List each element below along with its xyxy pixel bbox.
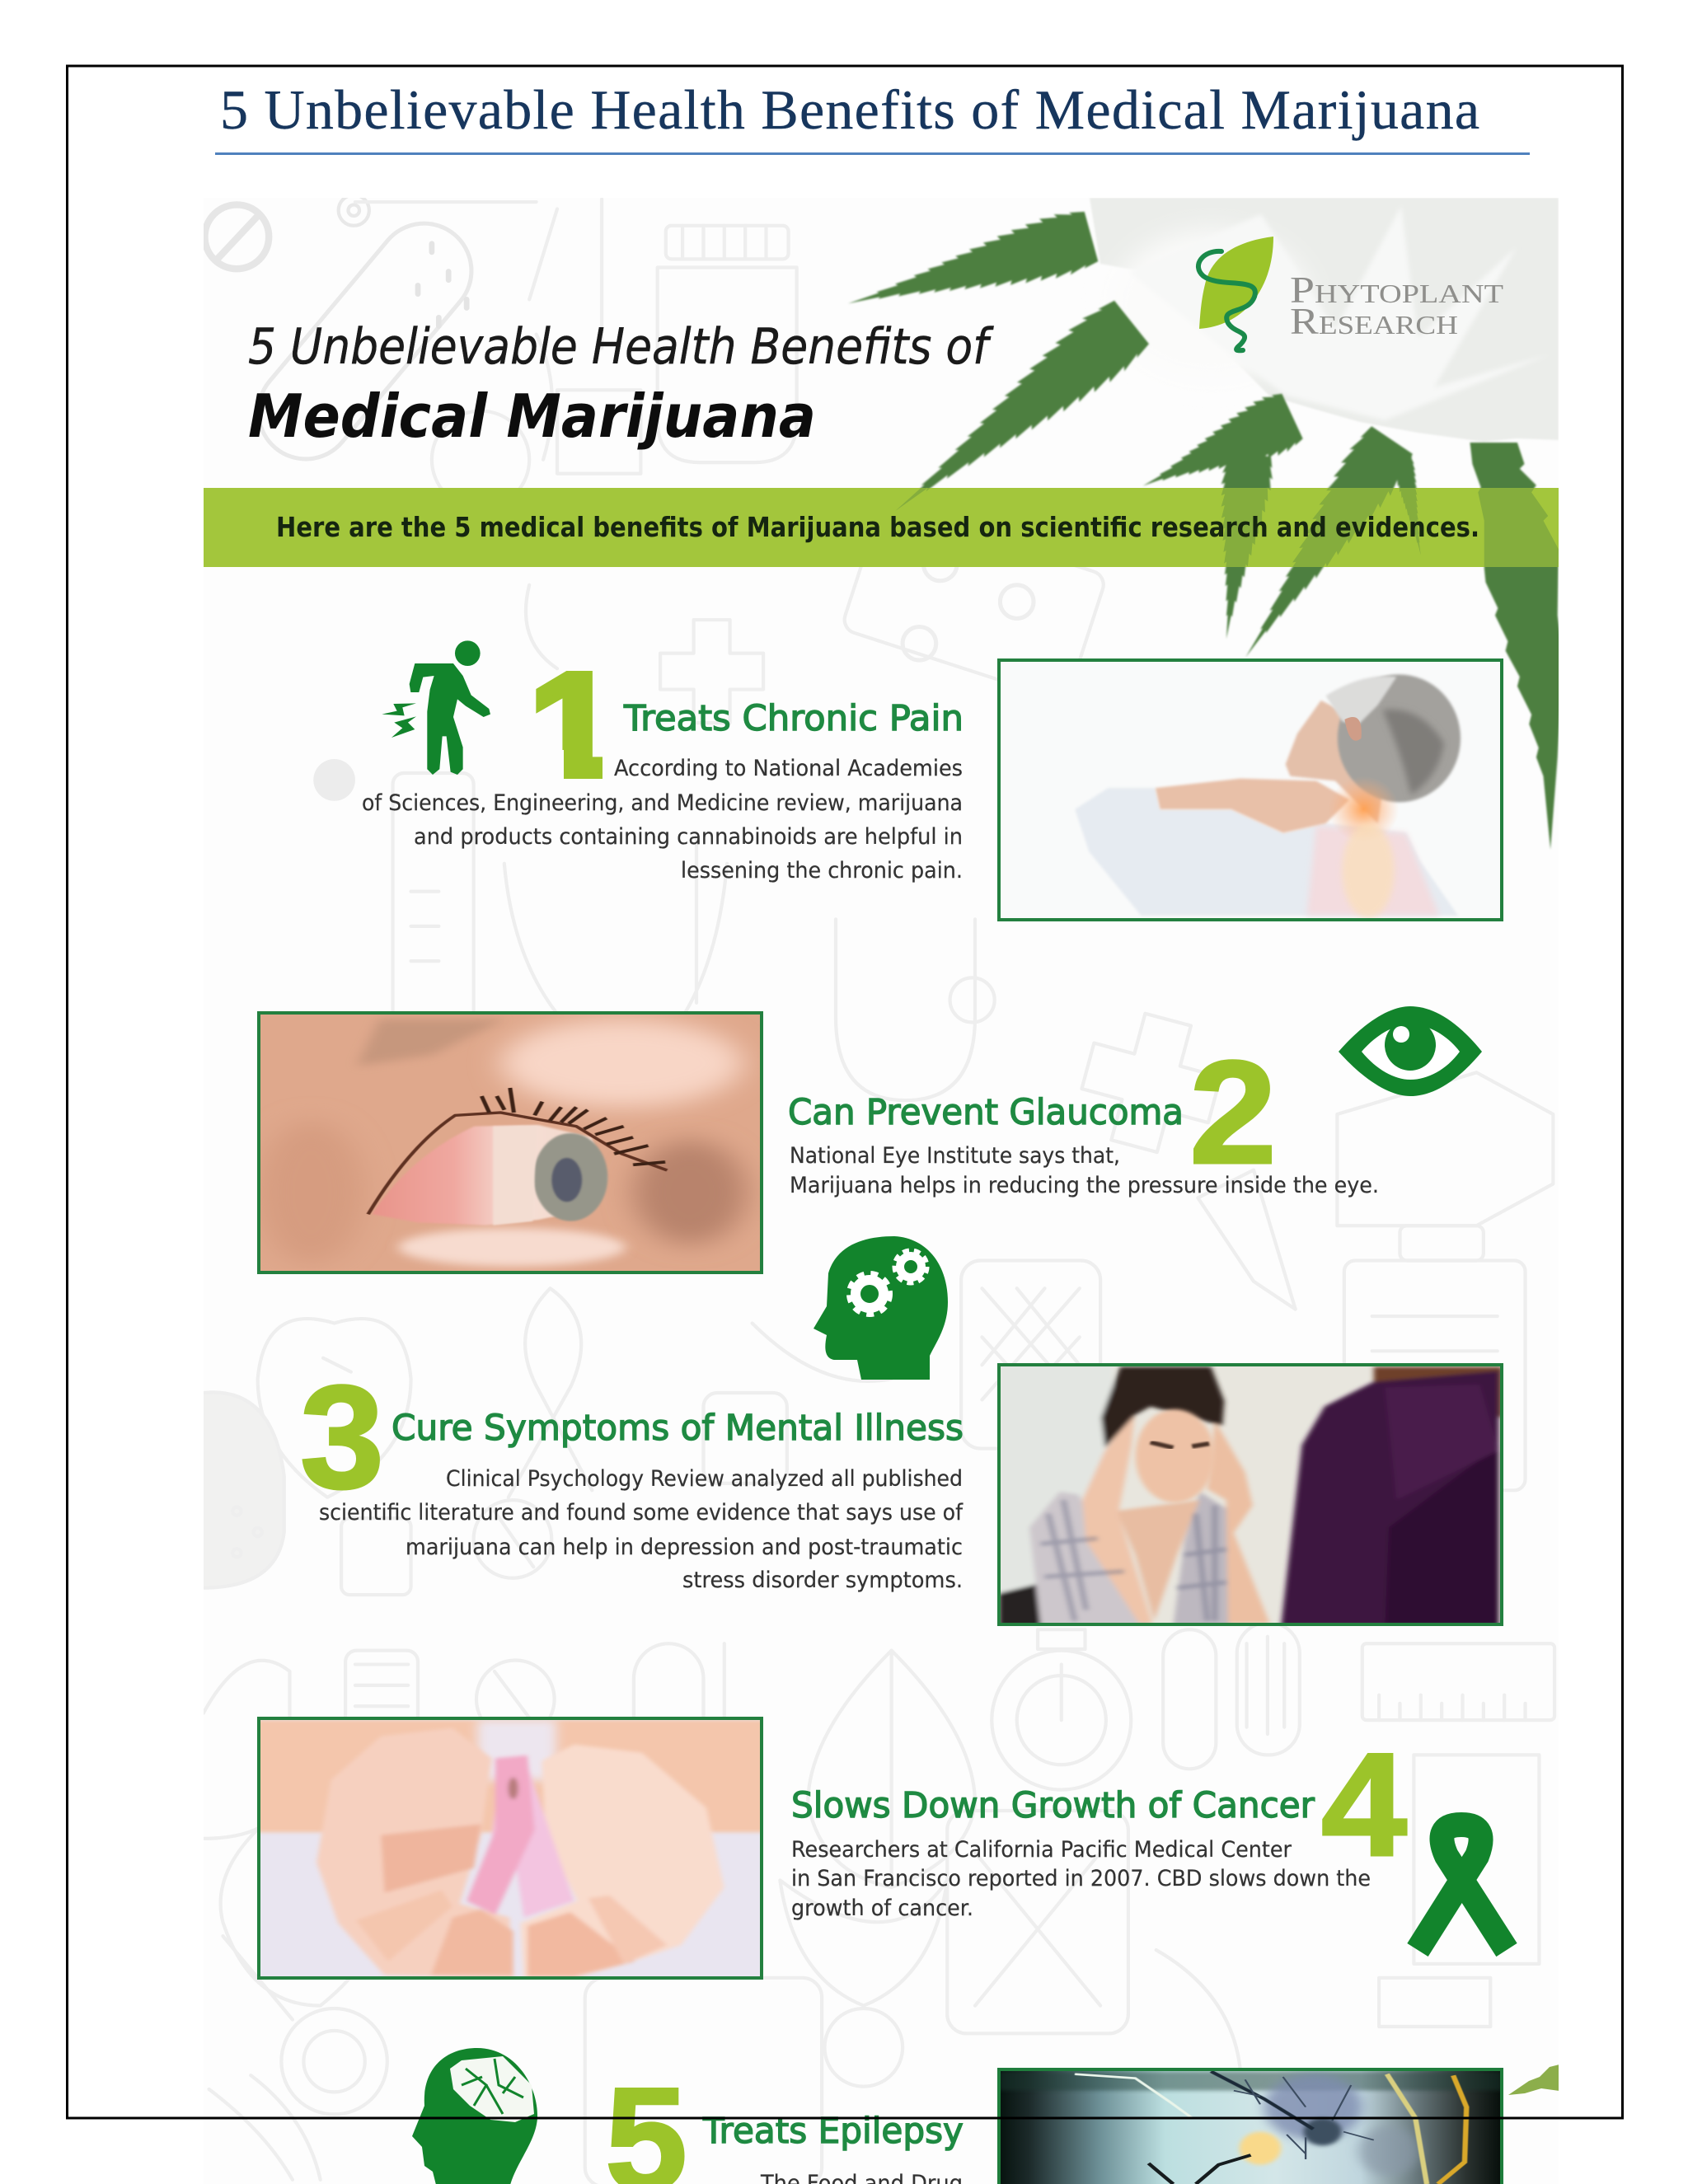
small leaf at bottom right [1508, 2064, 1559, 2095]
infographic heading line two: Medical Marijuana [248, 382, 816, 451]
logo wordmark: Phytoplant [1290, 269, 1504, 311]
document title: 5 Unbelievable Health Benefits of Medical Marijuana [220, 78, 1479, 141]
body text: growth of cancer. [791, 1896, 973, 1921]
icon: awareness ribbon [1418, 1825, 1507, 1950]
icon: eye [1339, 1006, 1482, 1096]
body text: lessening the chronic pain. [681, 858, 963, 883]
panel: infographic [204, 195, 1564, 2184]
icon: head with brain [412, 2048, 537, 2184]
intro band: Here are the 5 medical benefits of Marijuana based on scientific research and evidences. [276, 511, 1479, 543]
background doodles [204, 195, 1554, 2184]
number 4: 4 [1321, 1722, 1407, 1886]
body text [791, 1837, 1371, 1921]
heading: slows down growth of cancer: Slows Down Growth of Cancer [791, 1785, 1315, 1826]
body text: of Sciences, Engineering, and Medicine review, marijuana [362, 790, 963, 816]
body text [319, 1466, 964, 1593]
benefit 1: chronic pain [362, 640, 1502, 920]
infographic heading line one: 5 Unbelievable Health Benefits of [248, 318, 994, 376]
flower behind logo [1090, 198, 1559, 442]
intro band [204, 237, 1559, 567]
logo wordmark: Research [1290, 301, 1458, 342]
number 2: 2 [1189, 1030, 1277, 1194]
body text: National Eye Institute says that, [790, 1143, 1120, 1169]
body text [362, 756, 963, 883]
cannabis leaves [840, 206, 1564, 850]
heading: treats epilepsy: Treats Epilepsy [702, 2111, 964, 2152]
body text: Researchers at California Pacific Medical Center [791, 1837, 1292, 1863]
photo: hands with pink ribbon [256, 1718, 767, 1978]
benefit 3: mental illness [300, 1236, 1503, 1626]
body text: in San Francisco reported in 2007. CBD slows down the [791, 1866, 1371, 1891]
body text: marijuana can help in depression and post-traumatic [406, 1535, 963, 1560]
icon: person in pain [382, 640, 490, 775]
body text [790, 1143, 1379, 1198]
logo leaf and serpent [1198, 237, 1273, 350]
logo wordmark [1290, 269, 1504, 342]
photo: red eye [258, 1013, 762, 1272]
heading: cure symptoms of mental illness: Cure Symptoms of Mental Illness [392, 1408, 964, 1449]
title underline rule [215, 152, 1530, 155]
body text: Marijuana helps in reducing the pressure inside the eye. [790, 1173, 1379, 1198]
benefit 4: cancer [256, 1718, 1507, 1978]
number 1: 1 [529, 643, 618, 807]
body text: and products containing cannabinoids are helpful in [414, 824, 963, 850]
body text: Clinical Psychology Review analyzed all published [446, 1466, 963, 1492]
body text: According to National Academies [614, 756, 963, 781]
photo: distressed woman [999, 1362, 1503, 1626]
benefit 2: glaucoma [258, 1006, 1482, 1272]
heading: can prevent glaucoma: Can Prevent Glaucoma [788, 1092, 1184, 1133]
heading: treats chronic pain: Treats Chronic Pain [623, 698, 964, 739]
body text: scientific literature and found some evidence that says use of [319, 1500, 964, 1526]
photo: man holding neck [999, 660, 1502, 920]
benefit 5: epilepsy [412, 2048, 1559, 2184]
photo: neuron with lightning [999, 2069, 1503, 2184]
number 3: 3 [300, 1355, 384, 1519]
body text: stress disorder symptoms. [682, 1568, 963, 1593]
icon: head with gears [814, 1236, 948, 1380]
